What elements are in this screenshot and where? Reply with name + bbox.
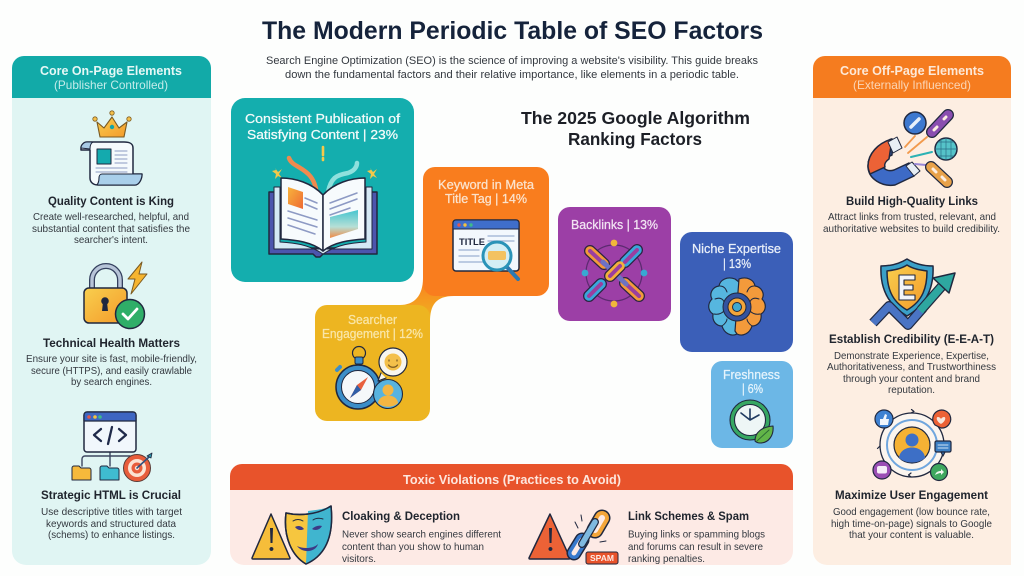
icon: crown and scroll <box>81 111 142 185</box>
icon: open book <box>269 147 377 257</box>
text: cloaking <box>342 509 501 565</box>
off-page panel heading <box>840 63 984 92</box>
heading: 2025 google algorithm ranking factors: The 2025 Google Algorithm <box>521 108 750 128</box>
card label <box>723 368 780 396</box>
text: technical health: Ensure your site is fast, mobile-friendly, <box>26 354 197 365</box>
intro text: Search Engine Optimization (SEO) is the science of improving a website's visibility. This guide breaks <box>266 55 758 67</box>
title: The Modern Periodic Table of SEO Factors <box>262 17 763 45</box>
card label: Title Tag | 14% <box>445 192 527 206</box>
connector between keyword and engagement cards <box>400 278 454 322</box>
text: quality content: Quality Content is King <box>48 194 174 208</box>
card label: | 6% <box>742 382 763 396</box>
text: high-quality links <box>823 194 1000 235</box>
card label <box>245 112 401 142</box>
text: quality content: Create well-researched, helpful, and <box>33 212 189 223</box>
text: technical health: by search engines. <box>71 377 152 388</box>
card label: Consistent Publication of <box>245 112 401 126</box>
on-page panel heading: Core On-Page Elements <box>40 63 182 78</box>
icon: html window, folders and target <box>72 412 152 482</box>
card: niche expertise 13% <box>680 232 793 352</box>
card: keyword in meta title 14% <box>423 167 549 296</box>
text: credibility: Demonstrate Experience, Expertise, <box>834 351 989 362</box>
text: link schemes <box>628 509 765 565</box>
icon: warning sign and mask <box>252 506 332 564</box>
card: freshness 6% <box>711 361 793 448</box>
icon: magnet attracting links <box>868 112 957 185</box>
text: user engagement: high time-on-page) signals to Google <box>831 519 992 530</box>
text: high-quality links: Attract links from trusted, relevant, and <box>828 212 996 223</box>
on-page panel heading <box>40 63 182 92</box>
card label: Backlinks | 13% <box>571 218 658 232</box>
card label <box>692 242 781 271</box>
icon: title window with magnifier: TITLE <box>459 237 485 248</box>
card: backlinks 13% <box>558 207 671 321</box>
text: strategic html: keywords and structured data <box>46 519 176 530</box>
text: strategic html: Use descriptive titles with target <box>41 507 182 518</box>
card label: Satisfying Content | 23% <box>247 128 398 142</box>
card label: Engagement | 12% <box>322 327 423 341</box>
card label: Keyword in Meta <box>438 178 534 192</box>
icon: user engagement cycle <box>873 410 951 480</box>
text: quality content: searcher's intent. <box>74 235 148 246</box>
text: high-quality links: authoritative websites to build credibility. <box>823 224 1000 235</box>
text: quality content <box>32 194 190 246</box>
icon: clock with leaf <box>730 400 773 443</box>
text: user engagement: that your content is valuable. <box>849 530 974 541</box>
text: technical health: Technical Health Matters <box>43 336 180 350</box>
icon: interlinked chain <box>582 240 647 307</box>
icon: shield with rising arrow <box>873 259 955 325</box>
icon: brain with gear <box>709 278 765 335</box>
card label: Niche Expertise <box>692 242 781 256</box>
panel: toxic violations <box>230 464 793 565</box>
text: credibility: through your content and brand <box>843 374 980 385</box>
text: technical health <box>26 336 197 388</box>
toxic heading: Toxic Violations (Practices to Avoid) <box>403 472 621 487</box>
text: link schemes: and forums can result in severe <box>628 542 763 553</box>
off-page panel heading: (Externally Influenced) <box>853 78 971 92</box>
text: strategic html: (schems) to enhance listings. <box>48 530 175 541</box>
panel: core on-page elements <box>12 56 211 565</box>
card label <box>322 313 423 341</box>
card label: | 13% <box>723 257 751 271</box>
icon: warning sign, broken chain and spam tag <box>529 514 618 564</box>
text: technical health: secure (HTTPS), and easily crawlable <box>31 366 192 377</box>
text: user engagement: Maximize User Engagement <box>835 488 988 502</box>
text: cloaking: Never show search engines different <box>342 530 501 540</box>
icon: stopwatch, smiley and user <box>336 346 407 409</box>
text: link schemes: ranking penalties. <box>628 554 705 565</box>
icon: padlock with bolt and check <box>84 262 147 328</box>
text: quality content: substantial content that satisfies the <box>32 224 190 235</box>
text: cloaking: content than you show to human <box>342 542 484 553</box>
text: credibility: reputation. <box>888 385 935 396</box>
panel: core off-page elements <box>813 56 1011 565</box>
text: credibility: Authoritativeness, and Trustworthiness <box>827 362 996 373</box>
intro text <box>266 55 758 81</box>
card: consistent publication 23% <box>231 98 414 282</box>
text: credibility <box>827 332 996 396</box>
card label: Freshness <box>723 368 780 382</box>
on-page panel heading: (Publisher Controlled) <box>54 78 168 92</box>
heading: 2025 google algorithm ranking factors <box>521 108 750 149</box>
off-page panel heading: Core Off-Page Elements <box>840 63 984 78</box>
card label: Searcher <box>348 313 397 327</box>
text: credibility: Establish Credibility (E-E-A-T) <box>829 332 994 346</box>
text: link schemes: Buying links or spamming blogs <box>628 530 765 540</box>
heading: 2025 google algorithm ranking factors: Ranking Factors <box>568 129 702 149</box>
text: user engagement: Good engagement (low bounce rate, <box>833 507 990 518</box>
card: searcher engagement 12% <box>315 305 430 421</box>
text: user engagement <box>831 488 992 541</box>
text: cloaking: Cloaking & Deception <box>342 509 460 523</box>
intro text: down the fundamental factors and their relative importance, like elements in a periodic table. <box>285 69 739 81</box>
text: strategic html <box>41 488 182 541</box>
text: cloaking: visitors. <box>342 554 376 565</box>
text: high-quality links: Build High-Quality Links <box>846 194 978 208</box>
card label <box>438 178 534 206</box>
text: strategic html: Strategic HTML is Crucial <box>41 488 181 502</box>
icon: warning sign, broken chain and spam tag: SPAM <box>590 553 614 563</box>
text: link schemes: Link Schemes & Spam <box>628 509 749 523</box>
